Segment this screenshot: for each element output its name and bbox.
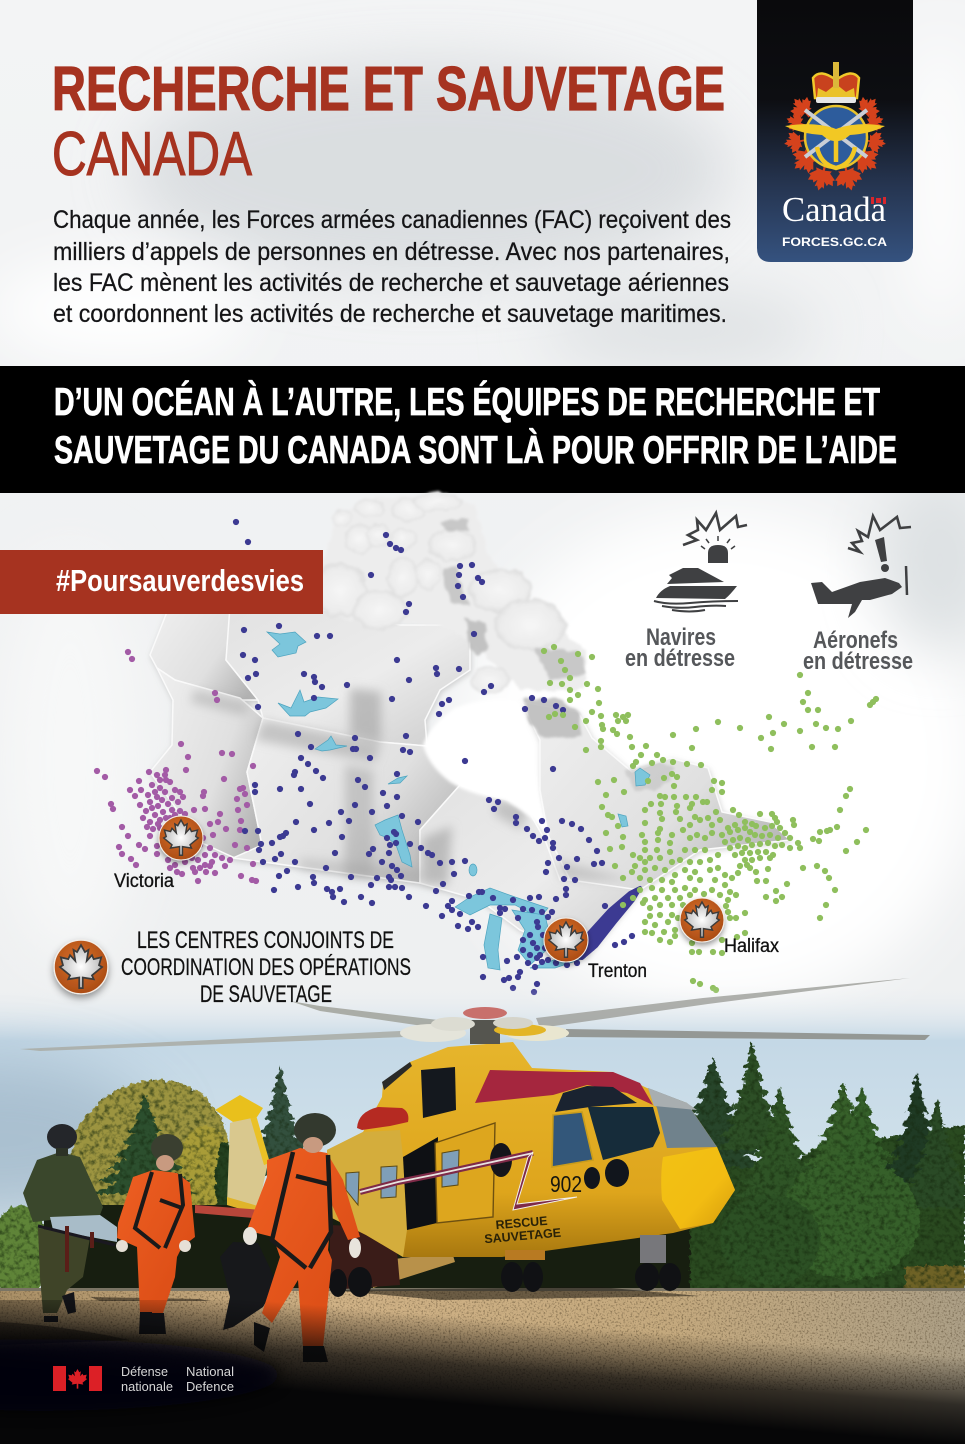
side door xyxy=(435,1123,495,1223)
Government of Canada signature: Défense xyxy=(121,1364,168,1379)
landing sponson xyxy=(370,1252,455,1288)
coordination centres: Trenton: Trenton xyxy=(588,961,647,982)
website: FORCES.GC.CA xyxy=(782,235,887,249)
cockpit roof xyxy=(555,1086,637,1112)
dots: Saint Lawrence corridor xyxy=(572,888,640,958)
legend: coordination centres xyxy=(54,927,411,1008)
title: CANADA xyxy=(52,120,252,189)
coordination centres: Victoria xyxy=(114,816,203,892)
icon: CAF emblem xyxy=(782,62,888,194)
rear fairing xyxy=(330,1225,400,1290)
legend icon: vessels in distress xyxy=(654,513,747,612)
badge: Canadian Armed Forces xyxy=(757,0,913,262)
dots: Halifax region xyxy=(544,647,876,990)
rotor hub xyxy=(400,1007,569,1044)
Government of Canada signature: nationale xyxy=(121,1379,173,1394)
markings: SAUVETAGE xyxy=(484,1226,562,1246)
hashtag tag xyxy=(0,550,323,614)
sky xyxy=(0,985,965,1295)
Hudson Bay xyxy=(423,700,550,835)
helicopter xyxy=(20,978,930,1297)
crew member: orange suit, centre xyxy=(243,1113,361,1362)
label: aircraft xyxy=(803,627,913,675)
intro paragraph: milliers d’appels de personnes en détresse. Avec nos partenaires, xyxy=(53,238,730,266)
tail number: 902 xyxy=(550,1171,582,1197)
engine intake xyxy=(421,1067,456,1118)
ground xyxy=(0,1287,965,1444)
label: aircraft: en détresse xyxy=(803,648,913,675)
label: vessels: en détresse xyxy=(625,645,735,672)
coordination centres: Trenton xyxy=(544,918,647,982)
trees: right xyxy=(659,1040,965,1295)
title: RECHERCHE ET SAUVETAGE xyxy=(52,55,725,124)
Government of Canada signature: Defence xyxy=(186,1379,234,1394)
intro paragraph: Chaque année, les Forces armées canadiennes (FAC) reçoivent des xyxy=(53,206,731,234)
intro paragraph xyxy=(53,206,731,328)
intro paragraph: les FAC mènent les activités de recherche et sauvetage aériennes xyxy=(53,269,729,297)
red dorsal band xyxy=(475,1070,653,1105)
bottom fade xyxy=(0,1300,965,1444)
nose xyxy=(661,1147,735,1229)
relief shading xyxy=(190,688,630,885)
trees: left xyxy=(0,1065,317,1298)
tail fin xyxy=(227,1117,268,1213)
wordmark: Canada: Canada xyxy=(782,190,886,229)
coordination centres: Halifax: Halifax xyxy=(724,936,779,957)
Government of Canada signature xyxy=(53,1364,234,1394)
rotor blades xyxy=(20,978,930,1051)
landing gear xyxy=(329,1235,681,1297)
windshield xyxy=(588,1107,660,1160)
understory behind helicopter xyxy=(44,1205,704,1293)
life raft xyxy=(357,1107,408,1130)
pale rear cabin xyxy=(327,1130,407,1257)
Arctic archipelago xyxy=(312,493,585,694)
headline band xyxy=(0,366,965,493)
title xyxy=(52,55,725,189)
dots: Trenton region xyxy=(236,522,632,992)
legend icon: aircraft in distress xyxy=(811,516,911,618)
intro paragraph: et coordonnent les activités de recherche et sauvetage maritimes. xyxy=(53,300,727,328)
livery stripe xyxy=(360,1153,533,1192)
hashtag tag: #Poursauverdesvies xyxy=(56,563,304,598)
icon: Canadian flag xyxy=(53,1366,102,1391)
label: aircraft: Aéronefs xyxy=(813,627,898,654)
map of Canada xyxy=(150,493,790,970)
crew member: green uniform xyxy=(23,1124,117,1322)
coordination centres: Victoria: Victoria xyxy=(114,871,174,892)
label: vessels xyxy=(625,624,735,672)
door opening xyxy=(403,1137,438,1230)
dots: aircraft and vessel incidents, Victoria region xyxy=(97,652,256,881)
Government of Canada signature: National xyxy=(186,1364,234,1379)
icon: small flag xyxy=(871,197,886,204)
cabin windows xyxy=(346,1150,459,1205)
dark relief patches xyxy=(440,518,675,790)
legend: coordination centres: LES CENTRES CONJOINTS DE xyxy=(137,927,394,954)
markings: RESCUE xyxy=(495,1214,548,1232)
black bag xyxy=(220,1242,277,1330)
crew member: orange suit, left xyxy=(116,1134,195,1334)
label: vessels: Navires xyxy=(646,624,716,651)
markings xyxy=(483,1213,562,1246)
photo: helicopter and rescue crew xyxy=(0,978,965,1444)
coordination centres: Halifax xyxy=(680,898,779,957)
lakes xyxy=(267,632,650,970)
legend: coordination centres: COORDINATION DES OPÉRATIONS xyxy=(121,954,411,981)
main body xyxy=(327,1042,735,1257)
stretcher xyxy=(50,1215,117,1242)
legend: coordination centres: DE SAUVETAGE xyxy=(200,981,332,1008)
